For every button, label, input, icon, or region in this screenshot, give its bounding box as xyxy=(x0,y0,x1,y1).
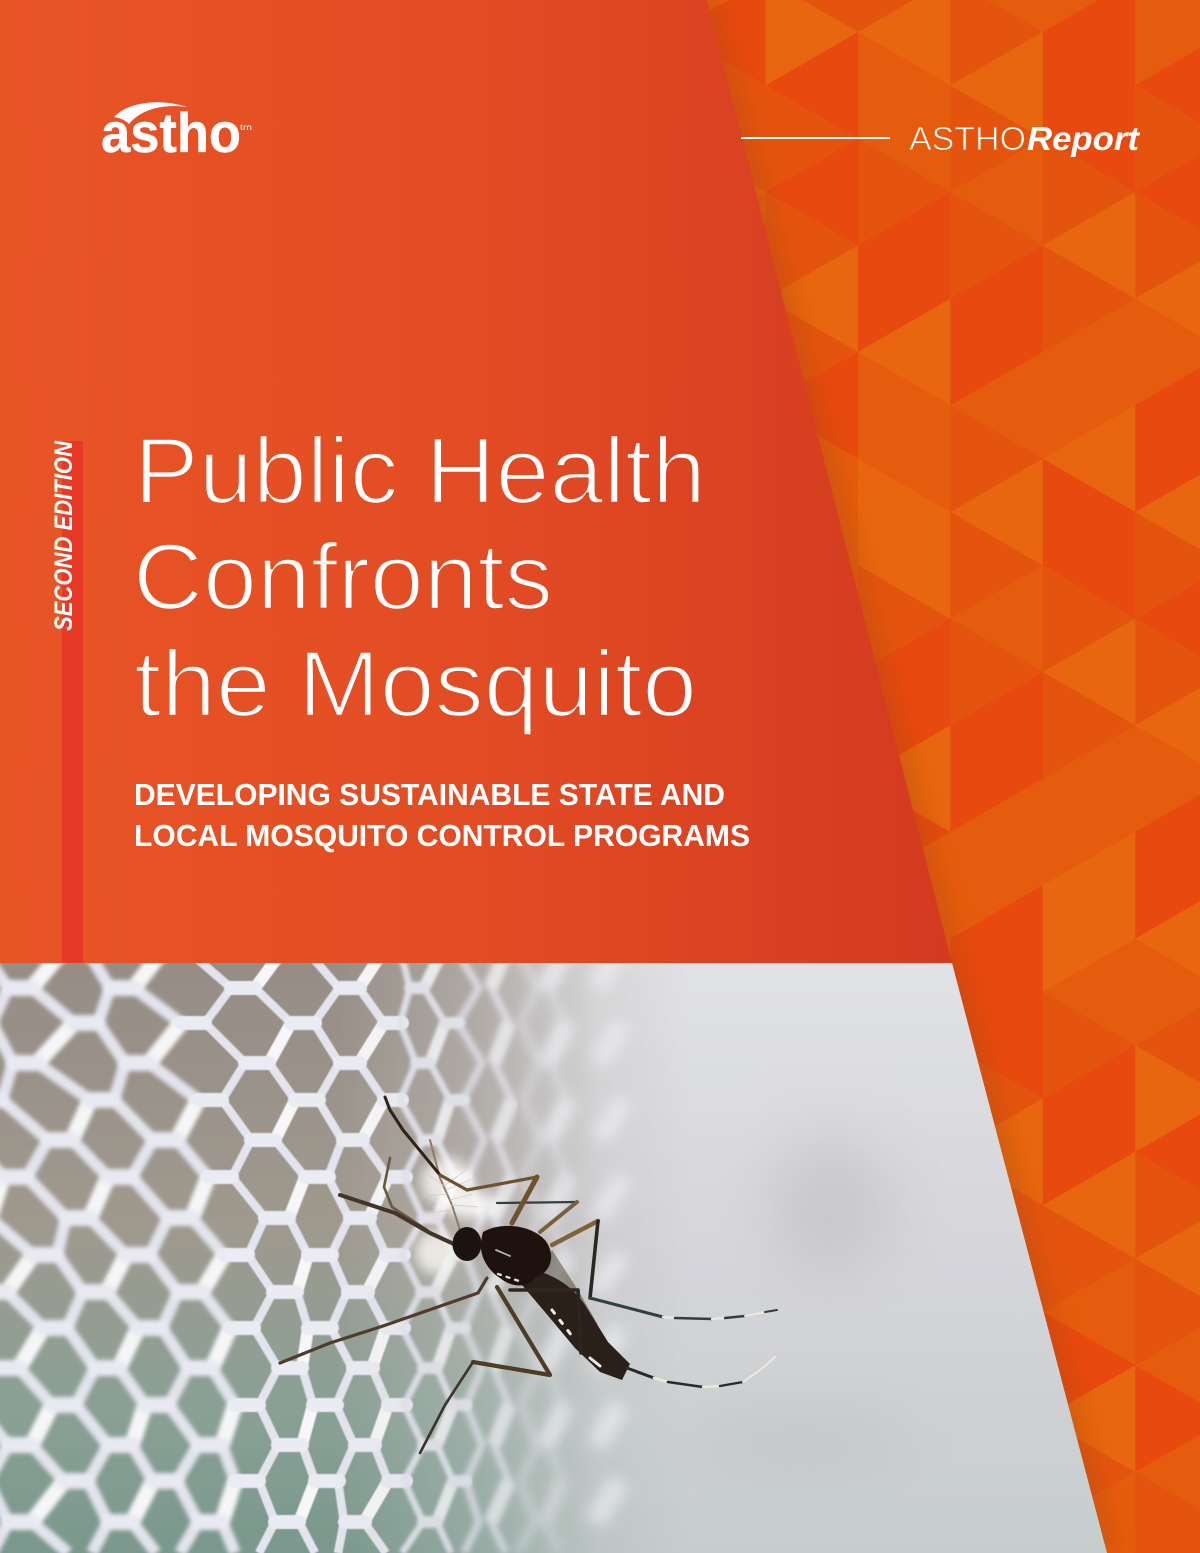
abdomen xyxy=(522,1268,630,1380)
title xyxy=(133,418,706,736)
title: Public Health xyxy=(134,418,706,523)
title: the Mosquito xyxy=(134,631,697,736)
logo: astho: astho xyxy=(101,101,241,164)
label: ASTHO Report xyxy=(909,120,1141,157)
subtitle: LOCAL MOSQUITO CONTROL PROGRAMS xyxy=(134,818,750,853)
header rule xyxy=(741,137,890,139)
lower tail leg with bands xyxy=(627,1357,775,1387)
icon: mosquito xyxy=(280,1097,777,1453)
thorax xyxy=(481,1226,551,1286)
rear leg with banded tarsus xyxy=(552,1221,777,1319)
subtitle xyxy=(134,777,750,853)
label: ASTHO Report: Report xyxy=(1027,120,1141,157)
background: orange triangle pattern xyxy=(708,0,1200,1553)
lower mid leg xyxy=(473,1287,550,1375)
wing xyxy=(535,1250,598,1325)
head xyxy=(452,1227,482,1261)
long front leg xyxy=(280,1278,487,1363)
logo: astho: tm xyxy=(240,123,252,132)
inner hind leg xyxy=(510,1290,581,1353)
subtitle: DEVELOPING SUSTAINABLE STATE AND xyxy=(134,777,725,812)
upper front leg xyxy=(385,1097,537,1223)
title: Confronts xyxy=(133,524,553,629)
accent bar xyxy=(62,441,83,963)
panel: orange title block xyxy=(0,0,952,963)
antenna plumes xyxy=(415,1140,500,1274)
label: ASTHO Report: ASTHO xyxy=(909,120,1026,157)
palp and proboscis xyxy=(340,1158,456,1245)
photo: mosquito net background xyxy=(0,950,1120,1553)
far middle leg xyxy=(497,1202,577,1203)
edition label: SECOND EDITION xyxy=(50,440,78,631)
